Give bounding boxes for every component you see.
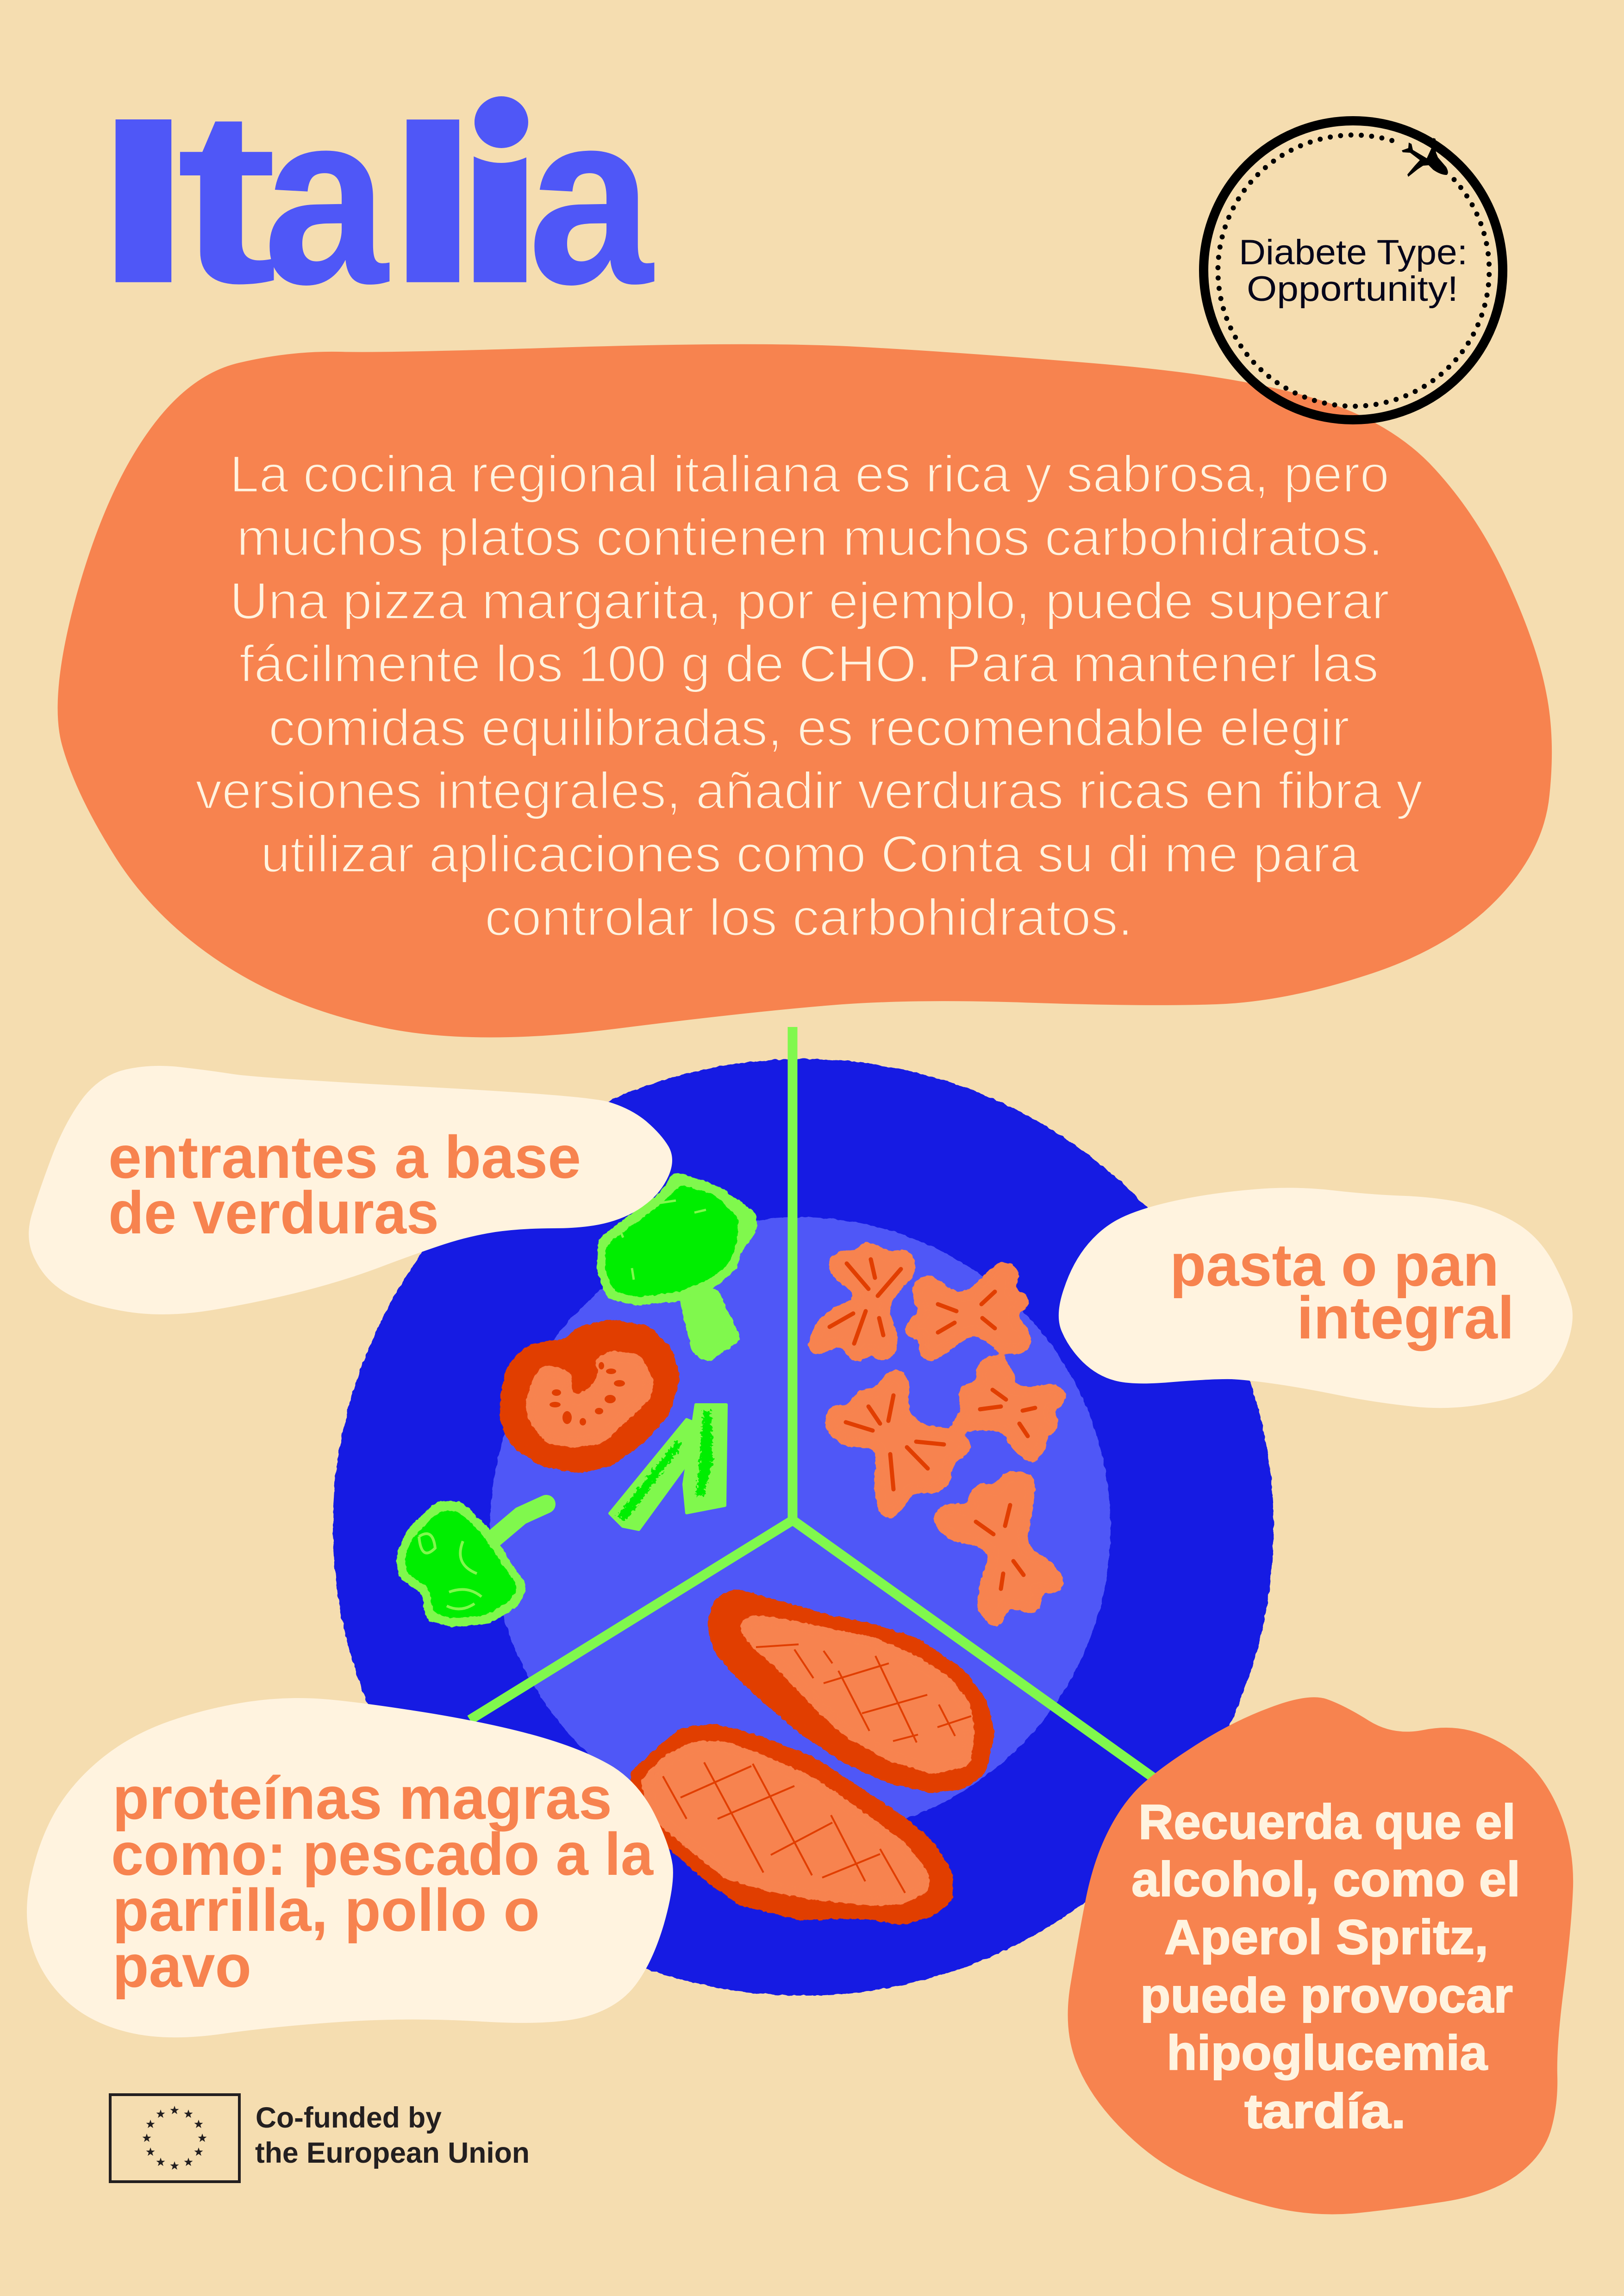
flag outline with stars (110, 2095, 239, 2182)
callout: entrantes a base de verduras: entrantes a base (108, 1123, 581, 1191)
callout: alcohol warning: hipoglucemia (1167, 2026, 1488, 2080)
callout: pasta o pan integral: pasta o pan (1170, 1231, 1499, 1299)
food: farfalle pasta (810, 1244, 1065, 1624)
plate dividers (470, 1027, 1153, 1777)
callout: entrantes a base de verduras: de verduras (108, 1179, 439, 1246)
title: i (448, 61, 552, 334)
badge text (1239, 233, 1468, 309)
food: tomato slice (502, 1321, 678, 1471)
callout: alcohol warning (1068, 1697, 1573, 2214)
callout: proteínas magras: proteínas magras (112, 1764, 612, 1832)
intro paragraph (195, 445, 1423, 946)
callout: proteínas magras: pavo (112, 1932, 251, 2000)
badge: Diabete Type Opportunity stamp (1204, 121, 1503, 420)
callout: proteínas magras: parrilla, pollo o (112, 1876, 540, 1944)
food: broccoli bottom (398, 1504, 546, 1624)
callout: alcohol warning: alcohol, como el (1131, 1852, 1520, 1907)
panel: intro text blob (58, 344, 1552, 1038)
food: grilled chicken bottom (632, 1726, 951, 1923)
intro paragraph: controlar los carbohidratos. (485, 889, 1133, 946)
plate rim and centre (333, 1059, 1274, 1996)
callout: pasta o pan integral: integral (1297, 1284, 1514, 1351)
callout: alcohol warning: Recuerda que el (1138, 1795, 1516, 1849)
title: I (91, 68, 196, 332)
callout: alcohol warning: tardía. (1244, 2084, 1406, 2139)
badge text: Diabete Type: (1239, 233, 1468, 272)
callout: pasta o pan integral (1059, 1188, 1573, 1408)
callout: alcohol warning: puede provocar (1140, 1968, 1513, 2023)
callout: entrantes a base de verduras (29, 1066, 672, 1314)
icon: airplane (1402, 138, 1448, 177)
intro paragraph: Una pizza margarita, por ejemplo, puede superar (230, 572, 1389, 630)
funding text: Co-funded by (256, 2102, 442, 2134)
intro paragraph: muchos platos contienen muchos carbohidratos. (237, 509, 1383, 566)
intro paragraph: versiones integrales, añadir verduras ricas en fibra y (195, 762, 1423, 820)
callout: proteínas magras (27, 1698, 673, 2037)
title (91, 60, 654, 335)
badge text: Opportunity! (1247, 269, 1458, 309)
EU co-funding logo (110, 2095, 530, 2182)
intro paragraph: comidas equilibradas, es recomendable elegir (269, 699, 1349, 757)
callout: alcohol warning: Aperol Spritz, (1164, 1910, 1488, 1965)
food: grilled chicken top (709, 1591, 993, 1791)
title: l (381, 80, 485, 330)
funding text: the European Union (255, 2137, 530, 2169)
intro paragraph: utilizar aplicaciones como Conta su di me para (261, 825, 1360, 883)
intro paragraph: fácilmente los 100 g de CHO. Para mantener las (239, 635, 1379, 693)
callout: proteínas magras: como: pescado a la (111, 1820, 654, 1888)
food: broccoli top (600, 1176, 753, 1363)
intro paragraph: La cocina regional italiana es rica y sabrosa, pero (230, 445, 1389, 503)
title: a (528, 62, 654, 335)
plate illustration (333, 1027, 1274, 1996)
title: a (263, 62, 389, 335)
title: t (177, 60, 277, 334)
funding text (255, 2102, 530, 2169)
food: green beans (610, 1405, 726, 1530)
